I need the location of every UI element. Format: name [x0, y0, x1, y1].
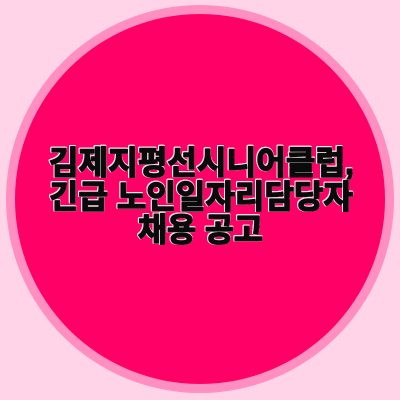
- title: 채용 공고: [138, 212, 263, 248]
- title: 김제지평선시니어클럽,: [49, 145, 354, 181]
- title: 긴급 노인일자리담당자: [49, 179, 353, 215]
- title: [49, 145, 354, 248]
